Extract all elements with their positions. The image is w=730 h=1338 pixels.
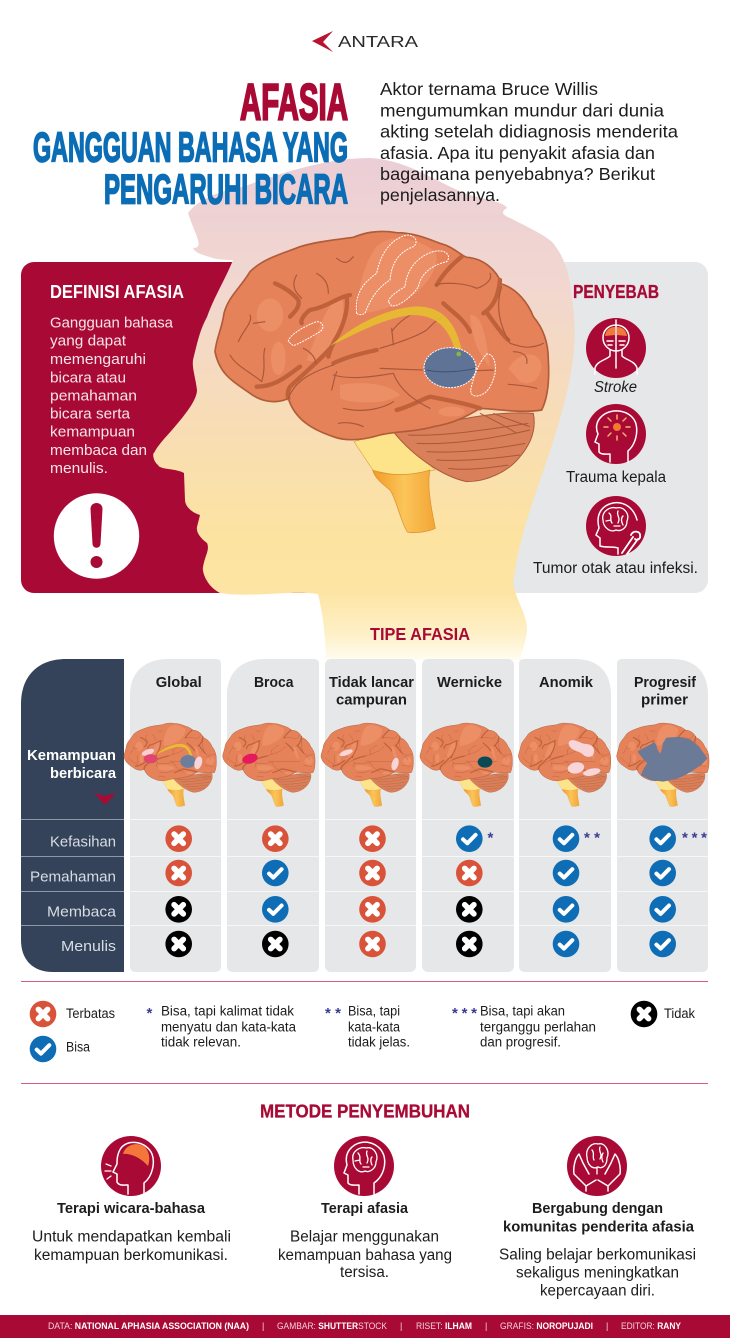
legend: terbatas: Terbatas <box>66 1006 115 1021</box>
heading: penyebab: PENYEBAB <box>573 282 659 302</box>
definition text: pemahaman <box>50 387 137 404</box>
icon: exclamation <box>54 493 139 579</box>
footer bar: | <box>485 1321 487 1331</box>
row labels: Pemahaman <box>30 869 116 886</box>
footer bar <box>0 1315 730 1338</box>
label: trauma kepala: Trauma kepala <box>566 469 666 486</box>
icon: tumor otak <box>586 496 646 556</box>
footnote: one asterisk <box>146 1004 296 1050</box>
label: kemampuan berbicara: Kemampuan <box>27 747 116 764</box>
definition text: bicara atau <box>50 369 126 386</box>
description: tersisa. <box>340 1264 389 1281</box>
method: bergabung dengan komunitas <box>499 1136 696 1300</box>
description <box>278 1229 452 1281</box>
footnote: three asterisks: terganggu perlahan <box>480 1020 596 1035</box>
icon: hands holding brain <box>567 1136 627 1196</box>
definition text: menulis. <box>50 460 108 477</box>
row labels <box>30 834 117 955</box>
intro text <box>380 79 678 205</box>
legend: bisa <box>30 1036 90 1062</box>
footnote: two asterisks: ** <box>325 1005 341 1022</box>
row labels: Membaca <box>47 904 117 921</box>
intro text: afasia. Apa itu penyakit afasia dan <box>380 143 655 163</box>
column: Global: Global <box>156 674 202 691</box>
label: Terapi afasia <box>321 1200 409 1217</box>
heading: tipe afasia: TIPE AFASIA <box>370 624 470 644</box>
label: stroke: Stroke <box>594 379 637 396</box>
footer bar: | <box>262 1321 264 1331</box>
icon: down arrow <box>94 793 116 805</box>
label: Bergabung dengan <box>532 1200 663 1217</box>
method: terapi afasia <box>278 1136 452 1281</box>
title: PENGARUHI BICARA <box>104 166 348 212</box>
intro text: akting setelah didiagnosis menderita <box>380 122 678 142</box>
description: Belajar menggunakan <box>290 1229 439 1246</box>
description: kemampuan berkomunikasi. <box>34 1247 228 1264</box>
column: Anomik: Anomik <box>539 674 594 691</box>
intro text: penjelasannya. <box>380 185 500 205</box>
intro text: Aktor ternama Bruce Willis <box>380 79 598 99</box>
column: Tidak lancar campuran: Tidak lancar <box>329 674 414 691</box>
label: Terapi wicara-bahasa <box>57 1200 206 1217</box>
label: tumor otak: Tumor otak atau infeksi. <box>533 560 698 577</box>
column: Tidak lancar campuran: campuran <box>336 692 407 708</box>
head silhouette <box>153 158 575 660</box>
icon: trauma kepala <box>586 404 646 464</box>
heading: definisi: DEFINISI AFASIA <box>50 282 184 302</box>
column: Progresif primer: Progresif <box>634 674 697 691</box>
title: AFASIA <box>240 74 348 130</box>
footnote: two asterisks: tidak jelas. <box>348 1035 410 1050</box>
footnote: three asterisks: Bisa, tapi akan <box>480 1004 565 1019</box>
label <box>503 1200 695 1236</box>
panel: penyebab <box>533 282 698 577</box>
legend: tidak: Tidak <box>664 1006 695 1021</box>
row header panel <box>21 659 124 972</box>
definition text: bicara serta <box>50 406 131 423</box>
legend: bisa: Bisa <box>66 1040 90 1055</box>
title: GANGGUAN BAHASA YANG <box>33 124 348 170</box>
column: Wernicke: Wernicke <box>437 674 502 691</box>
column: Broca: Broca <box>254 674 294 691</box>
definition text: Gangguan bahasa <box>50 314 174 331</box>
footnote: two asterisks: Bisa, tapi <box>348 1004 400 1019</box>
footnote: three asterisks: *** <box>452 1005 477 1022</box>
table: tipe afasia <box>21 659 709 972</box>
footer bar: RISET: ILHAM <box>416 1321 472 1331</box>
label: kemampuan berbicara <box>27 747 117 782</box>
legend: tidak <box>631 1001 695 1027</box>
footnote: one asterisk: menyatu dan kata-kata <box>161 1020 296 1035</box>
title <box>33 74 348 212</box>
heading: metode penyembuhan: METODE PENYEMBUHAN <box>260 1102 470 1122</box>
column: Wernicke: * <box>488 830 494 846</box>
row labels: Kefasihan <box>50 834 116 851</box>
row labels: Menulis <box>61 938 116 955</box>
definition text: yang dapat <box>50 333 127 350</box>
panel: definisi afasia <box>50 282 184 579</box>
legend <box>30 1001 695 1062</box>
footer bar: EDITOR: RANY <box>621 1321 681 1331</box>
logo: Antara <box>312 31 419 52</box>
definition text: kemampuan <box>50 424 135 441</box>
panel: definisi background <box>21 262 341 593</box>
column: Broca <box>223 659 319 972</box>
footnote: two asterisks: kata-kata <box>348 1020 400 1035</box>
column: Anomik <box>518 659 611 972</box>
column: Anomik: ** <box>584 830 600 846</box>
description <box>499 1246 696 1300</box>
icon: head with brain <box>334 1136 394 1196</box>
footnote: two asterisks <box>325 1004 410 1050</box>
footnote: one asterisk: * <box>146 1005 152 1022</box>
description: Untuk mendapatkan kembali <box>32 1229 231 1246</box>
description: kemampuan bahasa yang <box>278 1247 452 1264</box>
icon: speaking head <box>101 1136 161 1196</box>
definition text: membaca dan <box>50 442 147 459</box>
description: kepercayaan diri. <box>540 1283 655 1300</box>
column: Wernicke <box>420 659 514 972</box>
panel: penyebab background <box>400 262 708 593</box>
definition text: memengaruhi <box>50 351 146 368</box>
icon: stroke <box>586 318 646 378</box>
column: Progresif primer <box>617 659 709 972</box>
definition text <box>50 314 174 477</box>
description: Saling belajar berkomunikasi <box>499 1246 696 1263</box>
legend: terbatas <box>30 1001 115 1027</box>
footer bar: DATA: NATIONAL APHASIA ASSOCIATION (NAA) <box>48 1321 249 1331</box>
footer bar: GRAFIS: NOROPUJADI <box>500 1321 593 1331</box>
column: Global <box>124 659 221 972</box>
footer bar: GAMBAR: SHUTTERSTOCK <box>277 1321 387 1331</box>
footnote: one asterisk: Bisa, tapi kalimat tidak <box>161 1004 294 1019</box>
footnote: one asterisk: tidak relevan. <box>161 1035 241 1050</box>
column: Progresif primer: *** <box>682 830 707 846</box>
footnote: three asterisks <box>452 1004 596 1050</box>
label: kemampuan berbicara: berbicara <box>50 765 117 782</box>
description <box>32 1229 231 1264</box>
footer bar: | <box>400 1321 402 1331</box>
intro text: mengumumkan mundur dari dunia <box>380 100 664 120</box>
footnote: three asterisks: dan progresif. <box>480 1035 561 1050</box>
intro text: bagaimana penyebabnya? Berikut <box>380 164 655 184</box>
method: terapi wicara-bahasa <box>32 1136 231 1264</box>
label: komunitas penderita afasia <box>503 1219 695 1236</box>
description: sekaligus meningkatkan <box>516 1265 679 1282</box>
column: Tidak lancar campuran <box>321 659 416 972</box>
brain illustration <box>215 231 549 533</box>
logo: Antara: ANTARA <box>338 34 419 51</box>
column: Progresif primer: primer <box>641 692 688 708</box>
footer bar: | <box>606 1321 608 1331</box>
